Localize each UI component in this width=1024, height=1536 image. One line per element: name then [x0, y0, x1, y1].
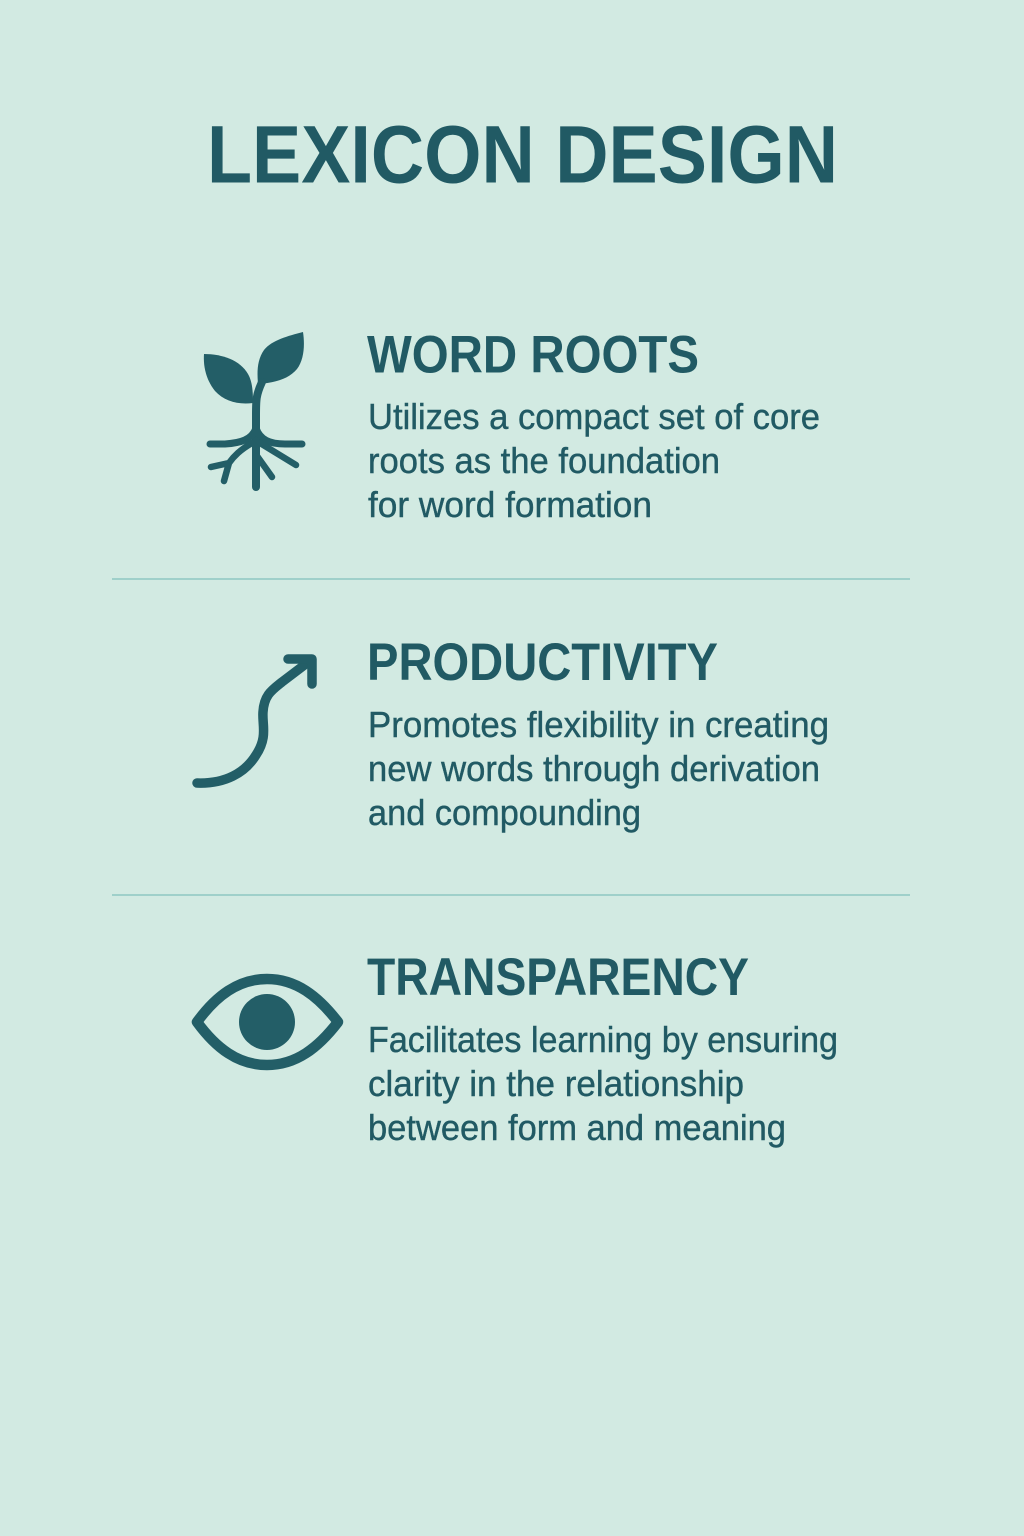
- description: word roots: [368, 396, 820, 525]
- panel: transparency: [197, 948, 838, 1148]
- panel: productivity: [197, 633, 829, 833]
- description: productivity: Promotes flexibility in creating: [368, 704, 829, 745]
- heading: productivity: PRODUCTIVITY: [367, 633, 718, 692]
- description: productivity: new words through derivation: [368, 748, 820, 789]
- heading: word roots: WORD ROOTS: [367, 326, 699, 384]
- description: transparency: between form and meaning: [368, 1107, 786, 1148]
- icon: sprout with roots: [204, 332, 304, 487]
- description: word roots: roots as the foundation: [368, 440, 720, 481]
- description: word roots: Utilizes a compact set of core: [368, 396, 820, 437]
- description: productivity: [368, 704, 829, 833]
- icon: rising curved arrow: [197, 659, 312, 783]
- icon: eye: [197, 979, 338, 1065]
- heading: transparency: TRANSPARENCY: [367, 948, 749, 1007]
- panel: word roots: [204, 326, 820, 525]
- title: LEXICON DESIGN: [207, 110, 838, 200]
- description: productivity: and compounding: [368, 792, 641, 833]
- description: transparency: Facilitates learning by ensuring: [368, 1019, 838, 1060]
- description: transparency: clarity in the relationship: [368, 1063, 744, 1104]
- description: transparency: [368, 1019, 838, 1148]
- description: word roots: for word formation: [368, 484, 652, 525]
